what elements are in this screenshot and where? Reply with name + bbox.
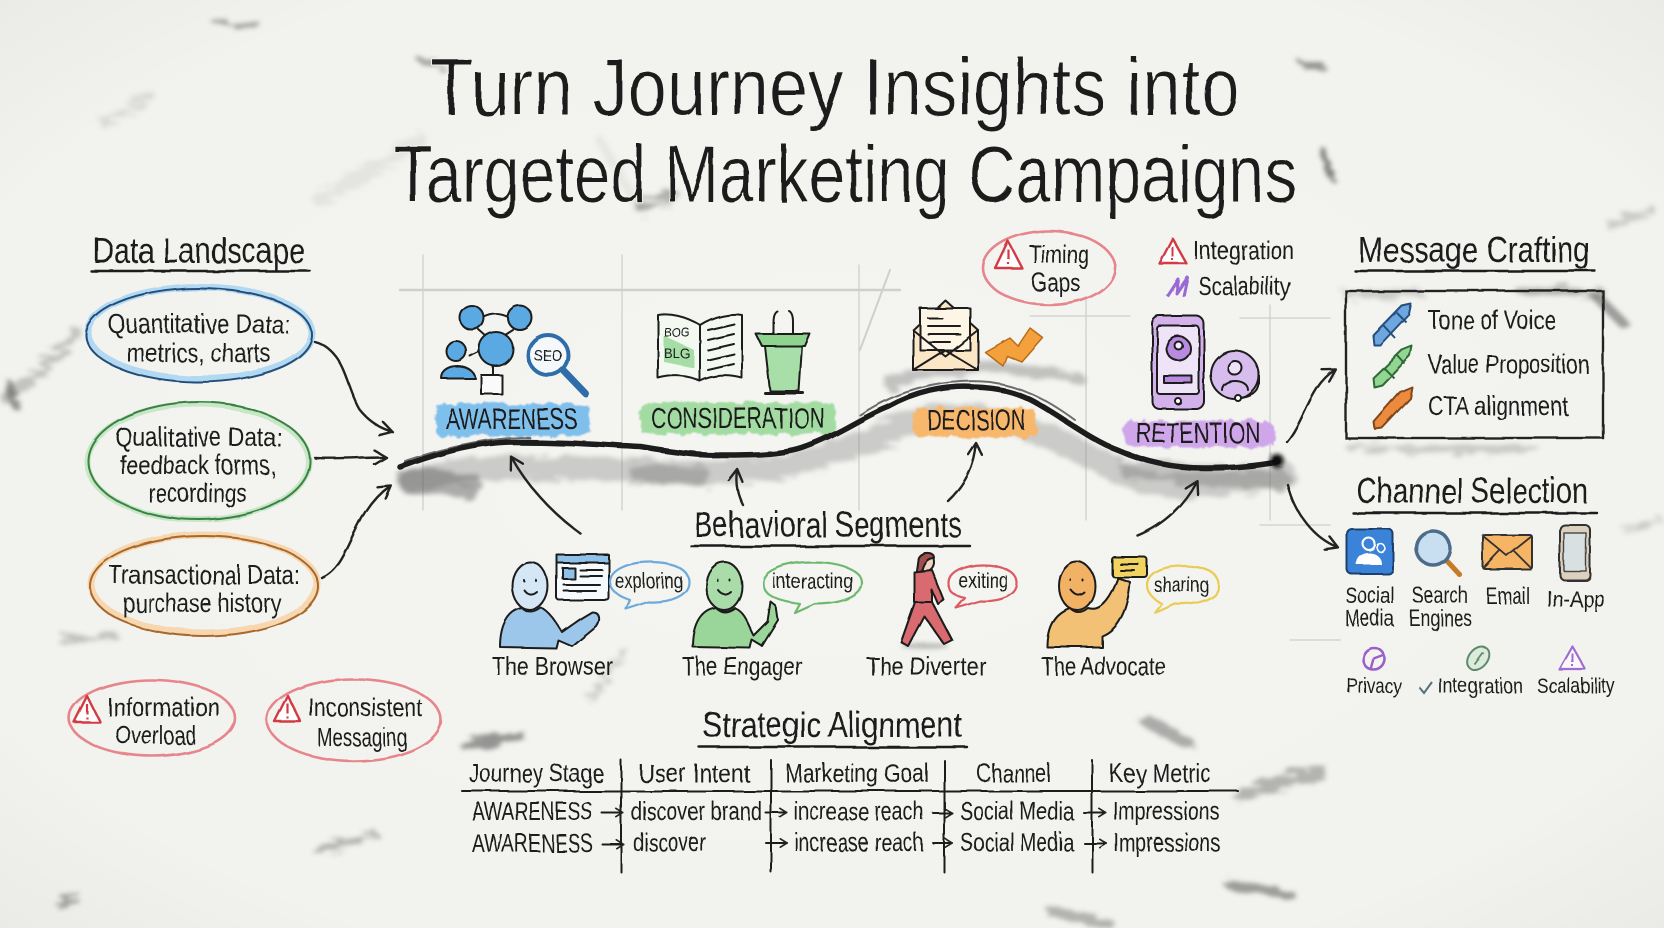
oval: transactional data: purchase history: [123, 588, 281, 618]
icon: orange arrow: [985, 328, 1043, 366]
arrow: diverter to decision: [948, 444, 976, 501]
heading: strategic alignment: Strategic Alignment: [702, 704, 962, 745]
table header row: Marketing Goal: [785, 758, 929, 788]
oval: quantitative data: Quantitative Data:: [108, 309, 290, 339]
table row 2: Impressions: [1113, 827, 1220, 857]
callout: inconsistent messaging: Inconsistent: [308, 692, 423, 722]
channel: search engines: Search: [1412, 582, 1468, 608]
table header row: User Intent: [638, 758, 751, 788]
icon: green marker: [1373, 346, 1412, 387]
panel: behavioral segments: [492, 504, 1219, 681]
stage: consideration: [651, 311, 825, 435]
table row 2: Social Media: [960, 827, 1074, 857]
title: Turn Journey Insights into: [430, 42, 1240, 133]
table row 1: increase reach: [794, 796, 924, 826]
speech bubble: exploring: [610, 562, 689, 609]
arrow: browser to awareness: [512, 458, 581, 534]
table row 1: AWARENESS: [472, 796, 593, 826]
icon: audience network and SEO magnifier: [441, 306, 585, 394]
heading: channel selection: Channel Selection: [1356, 470, 1588, 511]
icon: envelope with letter: [913, 300, 978, 370]
channel: search engines: Engines: [1409, 605, 1472, 631]
text: cta alignment: CTA alignment: [1428, 391, 1568, 421]
arrow: transactional to journey: [322, 486, 390, 578]
concern: integration: [1419, 642, 1523, 698]
label: retention: RETENTION: [1136, 418, 1261, 450]
concern: privacy: [1347, 648, 1401, 698]
panel: channel selection: [1345, 470, 1615, 698]
journey path: [400, 381, 1284, 468]
oval: qualitative data: recordings: [148, 478, 247, 508]
channel: social media: Social: [1345, 582, 1394, 608]
callout: inconsistent messaging: Messaging: [317, 722, 407, 752]
arrow: qualitative to journey: [315, 457, 385, 458]
persona: the advocate: The Advocate: [1041, 651, 1166, 681]
speech bubble: sharing: sharing: [1154, 574, 1209, 597]
concern: privacy: Privacy: [1347, 675, 1401, 698]
stage labels brush highlights: [436, 403, 1275, 447]
icon: blog book and podium: BOG: [664, 324, 690, 340]
oval: quantitative data: [86, 287, 312, 382]
concern: scalability: Scalability: [1537, 675, 1615, 698]
callout: information overload: [69, 680, 235, 756]
table row 2: discover: [633, 827, 706, 857]
label: consideration: CONSIDERATION: [651, 403, 825, 435]
arrow: advocate to retention: [1138, 482, 1197, 536]
heading: message crafting: Message Crafting: [1358, 229, 1590, 270]
table header row: [469, 758, 1211, 788]
title: [393, 42, 1297, 220]
table row 2: increase reach: [794, 827, 924, 857]
icon: blue marker: [1373, 304, 1411, 345]
table row 2: [472, 827, 1220, 858]
icon: blog book and podium: BLG: [664, 345, 690, 361]
table row 2: AWARENESS: [472, 828, 593, 858]
oval: qualitative data: [87, 402, 310, 520]
callout: scalability: Scalability: [1198, 271, 1290, 301]
speech bubble: exploring: exploring: [615, 570, 683, 593]
channel: email: [1483, 535, 1532, 609]
arrow: engager to consideration: [736, 470, 743, 505]
table row 1: [472, 796, 1220, 826]
persona: the browser: [492, 555, 689, 681]
concern: integration: Integration: [1438, 675, 1523, 698]
icon: orange marker: [1374, 387, 1412, 429]
table header row: Key Metric: [1109, 758, 1211, 788]
speech bubble: interacting: [763, 562, 862, 613]
table: strategic alignment: [462, 758, 1238, 872]
speech bubble: exiting: [949, 565, 1017, 608]
stage: awareness: [441, 306, 585, 436]
callout: timing gaps: Timing: [1029, 239, 1089, 269]
table header row: Journey Stage: [469, 758, 604, 788]
panel: data landscape: [86, 230, 392, 636]
arrow: journey to channel selection: [1288, 485, 1337, 547]
heading: data landscape: Data Landscape: [93, 230, 305, 271]
table row 1: Impressions: [1113, 796, 1220, 826]
oval: quantitative data: metrics, charts: [127, 338, 271, 368]
arrow: journey to message crafting: [1287, 370, 1335, 442]
concern: scalability: [1537, 646, 1615, 698]
callout: timing gaps: [983, 231, 1115, 305]
persona: the engager: [682, 562, 862, 681]
callout: scalability: [1167, 271, 1290, 301]
table header row: Channel: [977, 758, 1051, 788]
icon: phone and support bubble: [1152, 316, 1259, 409]
channel: in-app: In-App: [1547, 586, 1605, 612]
callout: integration: Integration: [1193, 235, 1294, 265]
speech bubble: exiting: exiting: [958, 569, 1008, 592]
speech bubble: sharing: [1147, 566, 1219, 613]
channel: search engines: [1409, 531, 1472, 631]
table row 1: Social Media: [960, 796, 1074, 826]
text: value proposition: Value Proposition: [1428, 349, 1589, 379]
panel: message crafting: [1346, 229, 1603, 438]
stage: decision: [913, 231, 1115, 437]
channel: email: Email: [1486, 583, 1530, 609]
persona: the browser: The Browser: [492, 651, 613, 681]
label: decision: DECISION: [927, 405, 1026, 437]
pencil grid behind journey: [400, 255, 1340, 640]
arrow: quantitative to journey: [315, 342, 392, 432]
callout: information overload: Overload: [116, 720, 196, 750]
channel: social media: Media: [1345, 605, 1394, 631]
heading: behavioral segments: Behavioral Segments: [694, 504, 962, 545]
channel: social media: [1345, 529, 1394, 631]
icon: audience network and SEO magnifier: SEO: [534, 348, 562, 365]
oval: transactional data: Transactional Data:: [109, 560, 300, 590]
persona: the engager: The Engager: [682, 651, 802, 681]
table row 1: discover brand: [631, 796, 762, 826]
persona: the advocate: [1041, 557, 1219, 681]
callout: information overload: Information: [107, 692, 220, 722]
panel: strategic alignment: [462, 704, 1238, 872]
title: Targeted Marketing Campaigns: [393, 129, 1297, 220]
oval: qualitative data: feedback forms,: [120, 450, 276, 480]
text: tone of voice: Tone of Voice: [1428, 305, 1556, 335]
callout: timing gaps: Gaps: [1031, 267, 1080, 297]
oval: qualitative data: Qualitative Data:: [115, 422, 282, 452]
icon: blog book and podium: [658, 311, 810, 393]
speech bubble: interacting: interacting: [772, 570, 853, 593]
callout: integration: [1159, 235, 1294, 265]
oval: transactional data: [90, 535, 318, 636]
channel: in-app: [1547, 525, 1605, 612]
message box: [1346, 291, 1603, 438]
stage: retention: [1136, 235, 1294, 450]
callout: inconsistent messaging: [267, 679, 441, 761]
label: awareness: AWARENESS: [446, 404, 578, 436]
journey smudge: [410, 367, 1285, 486]
persona: the diverter: The Diverter: [866, 651, 986, 681]
persona: the diverter: [866, 553, 1017, 681]
